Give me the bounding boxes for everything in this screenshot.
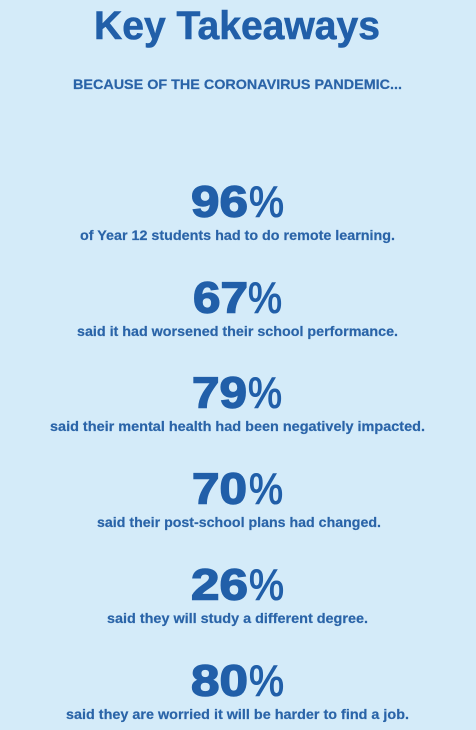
stat: 70% post-school plans: [97, 464, 381, 530]
number: 80%: [191, 656, 284, 706]
number: 70%: %: [249, 464, 283, 514]
number: 70%: [192, 464, 283, 514]
number: 67%: [193, 274, 282, 322]
number: 67%: %: [248, 274, 282, 322]
number: 26%: %: [249, 560, 284, 610]
stat: 67% school performance: [77, 274, 398, 339]
number: 80%: %: [249, 656, 284, 706]
number: 79%: %: [248, 368, 282, 418]
stat: 26% different degree: [107, 560, 368, 626]
number: 67%: 67: [193, 274, 248, 322]
number: 26%: 26: [191, 560, 248, 610]
number: 96%: [191, 178, 284, 226]
number: 26%: [191, 560, 284, 610]
number: 70%: 70: [192, 464, 247, 514]
caption: remote learning: of Year 12 students had to do remote learning.: [80, 227, 395, 243]
subheading: BECAUSE OF THE CORONAVIRUS PANDEMIC...: [73, 76, 402, 92]
caption: school performance: said it had worsened their school performance.: [77, 323, 398, 339]
number: 79%: 79: [192, 368, 247, 418]
number: 80%: 80: [191, 656, 248, 706]
title: Key Takeaways: [94, 4, 380, 48]
caption: different degree: said they will study a different degree.: [107, 610, 368, 626]
caption: post-school plans: said their post-school plans had changed.: [97, 514, 381, 530]
number: 96%: 96: [191, 178, 248, 226]
stat: 79% mental health: [50, 368, 425, 434]
number: 96%: %: [249, 178, 284, 226]
caption: mental health: said their mental health had been negatively impacted.: [50, 418, 425, 434]
caption: harder to find a job: said they are worried it will be harder to find a job.: [66, 706, 409, 722]
stat: 80% harder to find a job: [66, 656, 409, 722]
number: 79%: [192, 368, 282, 418]
stat: 96% remote learning: [80, 178, 395, 243]
